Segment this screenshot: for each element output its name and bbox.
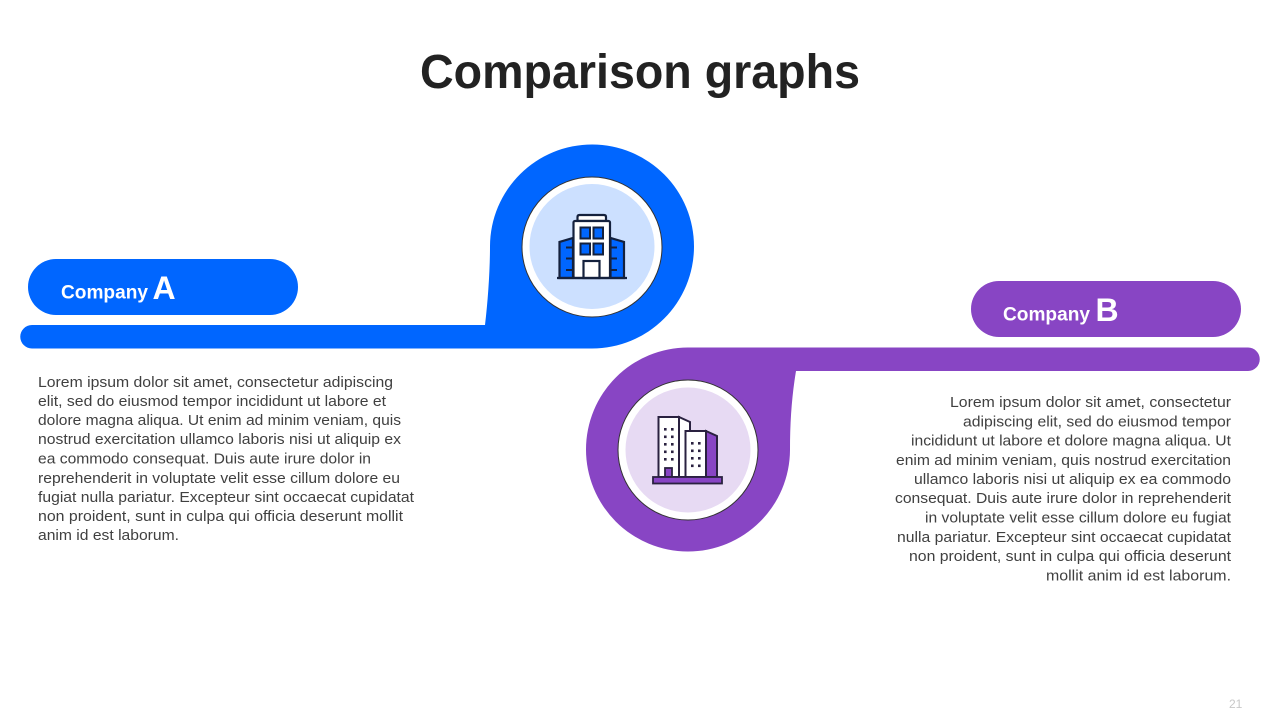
company A description: fugiat nulla pariatur. Excepteur sint occaecat cupidatat bbox=[38, 490, 414, 506]
page number: 21 bbox=[1229, 697, 1243, 711]
panel: company A bbox=[20, 144, 694, 544]
company A description: reprehenderit in voluptate velit esse cillum dolore eu bbox=[38, 471, 400, 487]
icon: city towers in circle bbox=[618, 380, 758, 520]
company A description: dolore magna aliqua. Ut enim ad minim veniam, quis bbox=[38, 413, 401, 429]
title: Comparison graphs bbox=[420, 46, 860, 99]
company A description: elit, sed do eiusmod tempor incididunt ut labore et bbox=[38, 394, 386, 410]
company B description: in voluptate velit esse cillum dolore eu fugiat bbox=[925, 510, 1231, 526]
company A description: nostrud exercitation ullamco laboris nisi ut aliquip ex bbox=[38, 432, 402, 448]
company B description: enim ad minim veniam, quis nostrud exercitation bbox=[896, 453, 1231, 469]
blue teardrop connector bbox=[20, 144, 694, 348]
company B label pill: Company bbox=[1003, 304, 1090, 326]
company B description: adipiscing elit, sed do eiusmod tempor bbox=[963, 414, 1231, 430]
company B description: non proident, sunt in culpa qui officia deserunt bbox=[909, 549, 1231, 565]
company B label pill bbox=[971, 281, 1241, 337]
panel: company B bbox=[586, 281, 1260, 584]
company A label pill: Company bbox=[61, 282, 148, 304]
company B description: ullamco laboris nisi ut aliquip ex ea commodo bbox=[914, 472, 1231, 488]
purple teardrop connector bbox=[586, 348, 1260, 552]
company B description: mollit anim id est laborum. bbox=[1046, 568, 1231, 584]
company B description: consequat. Duis aute irure dolor in reprehenderit bbox=[895, 491, 1231, 507]
company A description: ea commodo consequat. Duis aute irure dolor in bbox=[38, 452, 371, 468]
company A label pill bbox=[28, 259, 298, 315]
company A description: anim id est laborum. bbox=[38, 528, 179, 544]
company A description: Lorem ipsum dolor sit amet, consectetur adipiscing bbox=[38, 375, 393, 391]
company B description: nulla pariatur. Excepteur sint occaecat cupidatat bbox=[897, 530, 1231, 546]
company A label pill: A bbox=[152, 270, 176, 306]
company B description bbox=[895, 395, 1231, 584]
icon: office building in circle bbox=[522, 177, 662, 317]
company A description bbox=[38, 375, 414, 544]
company B description: incididunt ut labore et dolore magna aliqua. Ut bbox=[911, 434, 1231, 450]
company B description: Lorem ipsum dolor sit amet, consectetur bbox=[950, 395, 1231, 411]
company B label pill: B bbox=[1096, 292, 1119, 328]
company A description: non proident, sunt in culpa qui officia deserunt mollit bbox=[38, 509, 403, 525]
